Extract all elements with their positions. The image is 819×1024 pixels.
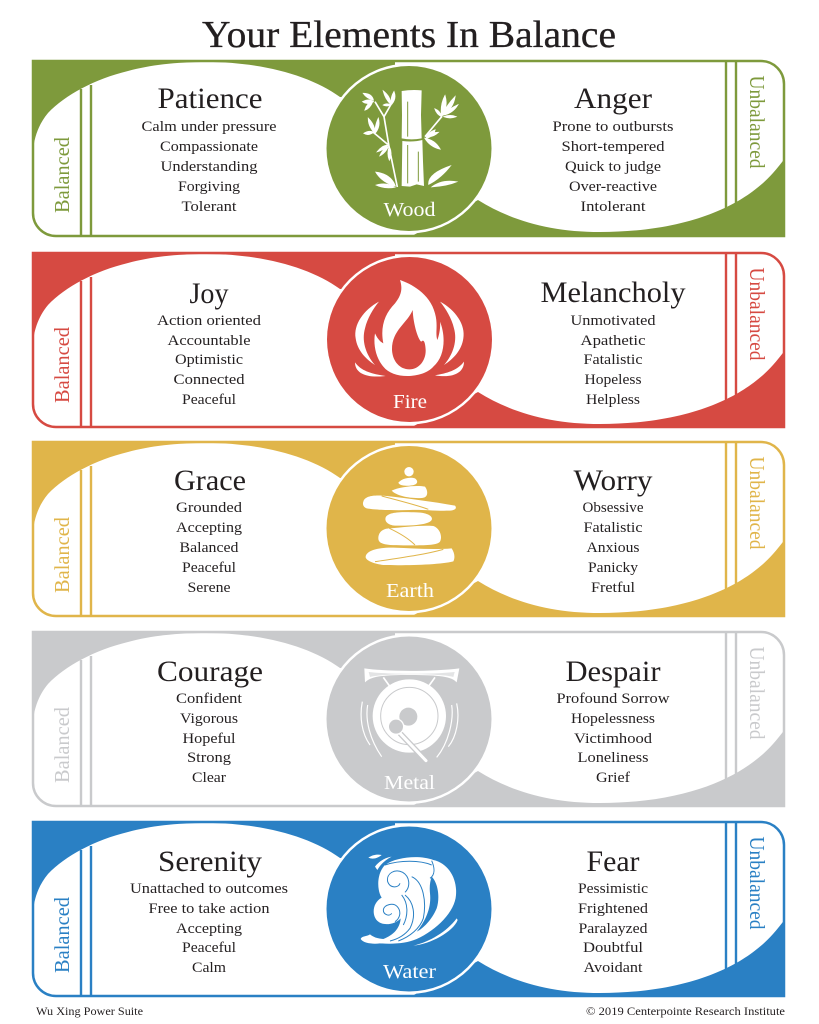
icon: flame	[355, 280, 464, 377]
balanced traits: wood: Calm under pressure	[142, 119, 277, 135]
unbalanced traits: metal: Despair	[566, 655, 661, 688]
balanced traits: water: Peaceful	[182, 940, 236, 956]
unbalanced traits: metal: Profound Sorrow	[556, 691, 670, 707]
element circle: wood: Wood	[384, 200, 436, 221]
element circle: water: Water	[383, 962, 437, 983]
unbalanced traits: earth	[574, 464, 652, 596]
unbalanced traits: water: Pessimistic	[578, 881, 648, 897]
balanced traits: water: Serenity	[158, 845, 262, 878]
unbalanced traits: water	[578, 845, 649, 976]
unbalanced traits: wood: Over-reactive	[569, 179, 657, 195]
balanced traits: wood	[142, 82, 277, 215]
unbalanced traits: metal: Victimhood	[574, 731, 653, 747]
balanced traits: earth: Grounded	[176, 500, 243, 516]
balanced traits: wood: Tolerant	[182, 199, 237, 215]
element circle: earth	[324, 444, 494, 614]
panel: metal	[32, 631, 785, 807]
unbalanced traits: earth: Fretful	[591, 580, 635, 596]
footer: left credit: Wu Xing Power Suite	[36, 1006, 143, 1018]
unbalanced traits: earth: Panicky	[588, 560, 639, 576]
unbalanced traits: metal	[556, 655, 670, 786]
balanced traits: metal: Hopeful	[182, 731, 236, 747]
balanced traits: fire: Peaceful	[182, 392, 236, 408]
unbalanced traits: metal: Loneliness	[578, 750, 649, 766]
balanced traits: fire: Connected	[174, 372, 245, 388]
title: Your Elements In Balance	[202, 14, 616, 56]
balanced traits: fire: Accountable	[168, 333, 251, 349]
unbalanced traits: water: Paralayzed	[578, 921, 648, 937]
unbalanced traits: water: Frightened	[578, 901, 649, 917]
balanced label: fire: Balanced	[50, 327, 74, 403]
unbalanced traits: earth: Worry	[574, 464, 652, 497]
panel background: fire	[32, 252, 785, 428]
element circle: wood	[324, 64, 494, 234]
unbalanced traits: fire: Unmotivated	[570, 313, 656, 329]
balanced traits: metal: Clear	[192, 770, 226, 786]
unbalanced label: metal: Unbalanced	[745, 646, 769, 740]
element circle: water	[324, 824, 494, 994]
unbalanced label: fire: Unbalanced	[745, 268, 769, 361]
balanced label: metal: Balanced	[50, 707, 74, 783]
unbalanced traits: wood: Prone to outbursts	[552, 119, 674, 135]
balanced traits: wood: Forgiving	[178, 179, 241, 195]
balanced traits: water: Free to take action	[148, 901, 270, 917]
unbalanced traits: earth: Anxious	[586, 540, 640, 556]
panel: wood	[32, 60, 785, 237]
panel background: earth	[32, 441, 785, 617]
element circle: fire: Fire	[393, 392, 427, 413]
balanced label: wood: Balanced	[50, 137, 74, 213]
icon: gong	[361, 668, 459, 761]
balanced traits: water	[130, 845, 288, 976]
balanced traits: earth: Accepting	[176, 520, 243, 536]
balanced traits: earth: Peaceful	[182, 560, 236, 576]
panel background: wood	[32, 60, 785, 237]
unbalanced traits: metal: Hopelessness	[571, 711, 655, 727]
element circle: metal: Metal	[384, 773, 436, 794]
balanced traits: metal: Strong	[187, 750, 232, 766]
unbalanced traits: earth: Fatalistic	[584, 520, 643, 536]
balanced traits: metal: Confident	[176, 691, 243, 707]
unbalanced traits: fire	[540, 276, 686, 408]
unbalanced traits: earth: Obsessive	[582, 500, 644, 516]
element circle: metal	[324, 634, 494, 804]
icon: stacked stones	[363, 467, 456, 565]
balanced traits: fire	[157, 277, 262, 408]
footer: copyright: © 2019 Centerpointe Research Institute	[586, 1006, 785, 1018]
element circle: earth: Earth	[386, 581, 434, 602]
unbalanced traits: fire: Fatalistic	[584, 352, 643, 368]
unbalanced traits: wood: Quick to judge	[565, 159, 661, 175]
balanced traits: fire: Action oriented	[157, 313, 262, 329]
balanced traits: wood: Understanding	[160, 159, 258, 175]
balanced traits: earth	[174, 464, 246, 596]
unbalanced traits: wood: Anger	[574, 82, 652, 115]
unbalanced traits: wood: Intolerant	[580, 199, 646, 215]
panel: fire	[32, 252, 785, 428]
balanced label: water: Balanced	[50, 897, 74, 973]
icon: wave	[361, 855, 458, 946]
balanced traits: metal: Courage	[157, 655, 263, 688]
unbalanced traits: fire: Apathetic	[580, 333, 646, 349]
balanced traits: earth: Grace	[174, 464, 246, 497]
icon: bamboo	[363, 90, 458, 188]
unbalanced traits: water: Doubtful	[583, 940, 643, 956]
balanced traits: wood: Patience	[158, 82, 262, 115]
panel: water	[32, 821, 785, 997]
unbalanced traits: water: Avoidant	[584, 960, 643, 976]
unbalanced traits: metal: Grief	[596, 770, 630, 786]
element circle: fire	[324, 254, 494, 424]
balanced traits: water: Unattached to outcomes	[130, 881, 288, 897]
balanced traits: wood: Compassionate	[160, 139, 258, 155]
unbalanced traits: wood: Short-tempered	[562, 139, 665, 155]
unbalanced label: earth: Unbalanced	[745, 456, 769, 550]
balanced traits: metal: Vigorous	[180, 711, 238, 727]
balanced traits: fire: Joy	[190, 277, 228, 310]
unbalanced label: water: Unbalanced	[745, 836, 769, 930]
unbalanced traits: fire: Helpless	[586, 392, 640, 408]
panel: earth	[32, 441, 785, 617]
unbalanced traits: water: Fear	[586, 845, 640, 878]
balanced traits: water: Calm	[192, 960, 226, 976]
balanced label: earth: Balanced	[50, 517, 74, 593]
balanced traits: water: Accepting	[176, 921, 243, 937]
unbalanced traits: fire: Melancholy	[540, 276, 686, 309]
balanced traits: fire: Optimistic	[175, 352, 243, 368]
balanced traits: earth: Balanced	[180, 540, 239, 556]
unbalanced label: wood: Unbalanced	[745, 76, 769, 169]
panel background: metal	[32, 631, 785, 807]
unbalanced traits: wood	[552, 82, 674, 215]
balanced traits: earth: Serene	[188, 580, 231, 596]
balanced traits: metal	[157, 655, 263, 786]
panel background: water	[32, 821, 785, 997]
unbalanced traits: fire: Hopeless	[584, 372, 642, 388]
